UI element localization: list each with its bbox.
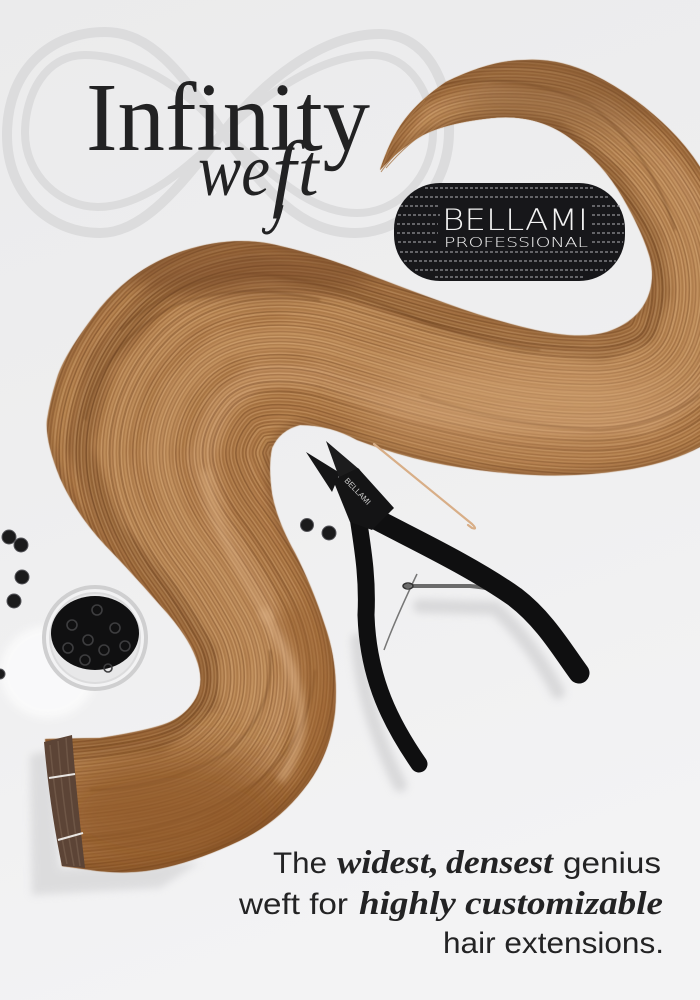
velcro texture <box>397 188 624 277</box>
elastic bands <box>49 774 83 840</box>
title: f <box>272 123 306 219</box>
velcro logo: BELLAMI <box>442 203 588 237</box>
hair weft <box>44 55 700 880</box>
hair tail wisps <box>381 98 440 172</box>
jaws and head <box>306 452 340 492</box>
tagline: weft for <box>238 888 348 921</box>
nipper pliers <box>306 441 579 785</box>
handles <box>357 510 579 764</box>
velcro logo <box>442 203 588 251</box>
loose beads <box>0 518 336 679</box>
jar shadow <box>0 626 96 718</box>
velcro grip patch <box>394 183 625 281</box>
infinity symbol <box>7 32 449 233</box>
jar of beads <box>44 587 146 689</box>
velcro logo: PROFESSIONAL <box>444 236 588 251</box>
hair strand texture <box>53 95 700 802</box>
beads <box>51 596 139 670</box>
f descender <box>263 205 282 233</box>
tagline: The <box>273 847 327 880</box>
title: t <box>298 130 321 212</box>
hair edge shading <box>45 60 700 872</box>
hair highlights <box>262 610 301 780</box>
title: Infinity <box>86 64 370 172</box>
tagline: highly customizable <box>359 886 663 922</box>
spring <box>403 586 510 596</box>
weft seam <box>44 735 85 868</box>
orange stick tool <box>374 444 475 528</box>
tagline: widest, <box>337 845 439 881</box>
tagline: hair extensions. <box>443 927 664 960</box>
hair colour bands <box>45 55 700 880</box>
hair dark streaks <box>70 80 700 838</box>
hair shading <box>45 750 295 880</box>
tagline: genius <box>563 847 661 880</box>
title: we <box>198 130 270 212</box>
pliers shadow <box>358 606 558 785</box>
tagline: densest <box>446 845 554 881</box>
title <box>86 64 370 233</box>
tagline <box>238 845 664 960</box>
hair body <box>45 60 700 872</box>
hair shadows <box>30 750 200 895</box>
pliers logo: BELLAMI <box>343 476 373 507</box>
